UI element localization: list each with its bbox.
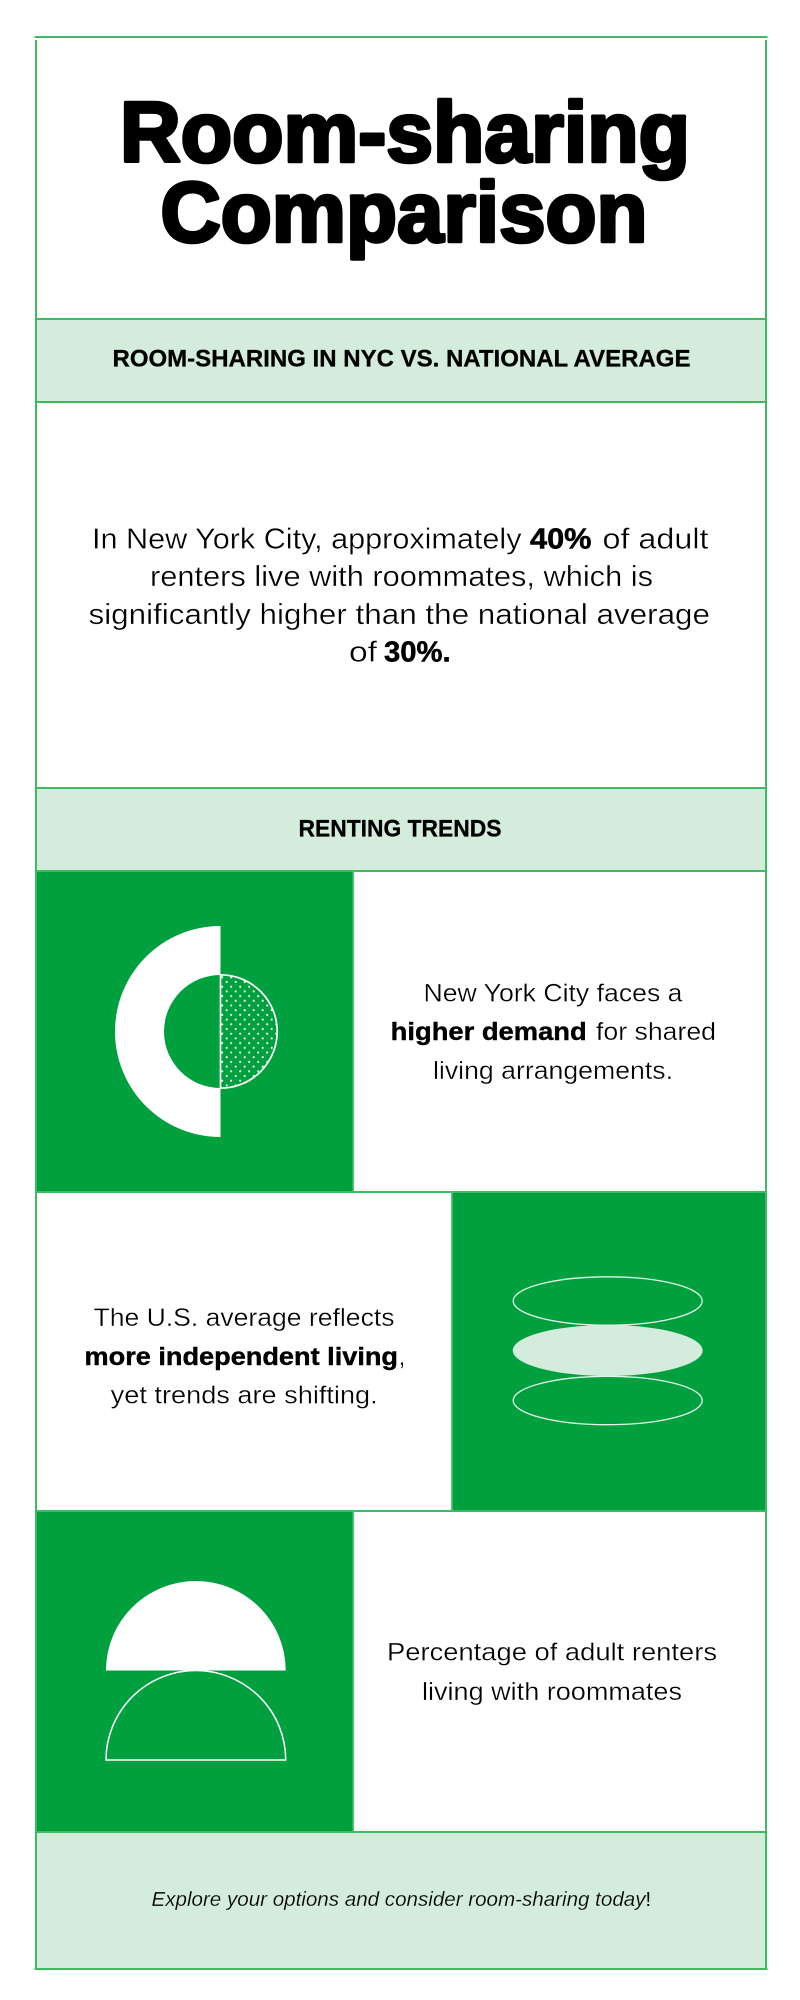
text block: intro: 30%. [384, 637, 451, 669]
panel: background bands [36, 319, 766, 1969]
text block: intro: of [349, 637, 378, 669]
text block: intro [88, 523, 710, 669]
text block: higher demand: for shared [596, 1018, 716, 1046]
heading: renting trends: RENTING TRENDS [298, 816, 502, 843]
text block: higher demand: living arrangements. [433, 1057, 673, 1085]
text block: intro: In New York City, approximately [92, 523, 522, 555]
text block: percentage: living with roommates [422, 1678, 682, 1706]
text block: independent living: more independent living [84, 1343, 398, 1371]
title: Room-sharing [120, 86, 690, 180]
footer call to action: Explore your options and consider room-sharing today [152, 1889, 647, 1911]
icon: stacked ellipses [513, 1277, 703, 1425]
text block: independent living: The U.S. average reflects [94, 1304, 394, 1332]
text block: independent living: yet trends are shifting. [111, 1381, 378, 1409]
title: Comparison [160, 166, 648, 260]
text block: higher demand: higher demand [391, 1018, 587, 1046]
heading: room-sharing in NYC vs national average: ROOM-SHARING IN NYC VS. NATIONAL AVERAGE [112, 346, 690, 373]
text block: independent living: , [398, 1343, 405, 1371]
text block: intro: renters live with roommates, which is [150, 561, 653, 593]
text block: percentage [387, 1639, 717, 1706]
icon: stacked semicircles [106, 1581, 286, 1760]
text block: intro: of adult [602, 523, 708, 555]
title [120, 86, 690, 260]
text block: intro: 40% [530, 523, 592, 555]
icon: half ring with dotted semicircle [115, 926, 277, 1137]
text block: percentage: Percentage of adult renters [387, 1639, 717, 1667]
text block: intro: significantly higher than the national average [88, 599, 710, 631]
text block: independent living [84, 1304, 405, 1409]
footer call to action: ! [646, 1889, 651, 1911]
text block: higher demand [391, 980, 716, 1085]
text block: higher demand: New York City faces a [424, 980, 683, 1008]
